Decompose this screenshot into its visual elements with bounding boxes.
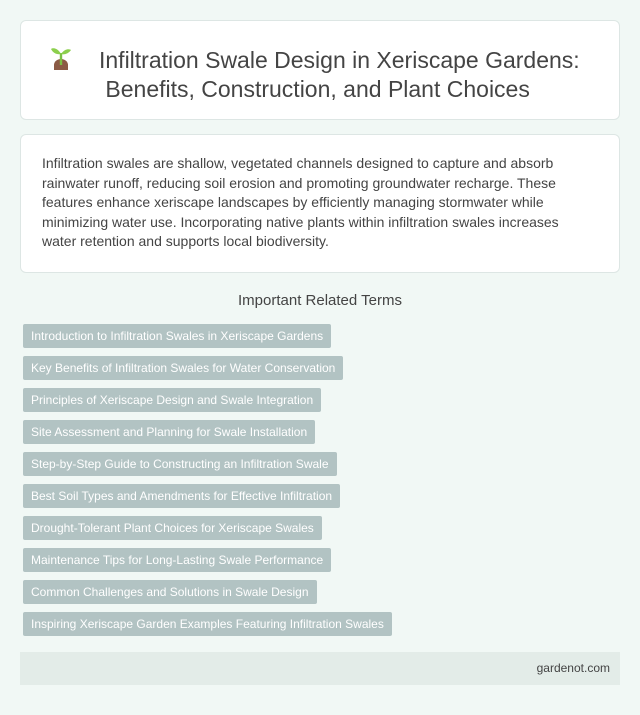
intro text panel: [20, 134, 620, 273]
tag list: Principles of Xeriscape Design and Swale Integration: [31, 393, 313, 407]
intro text panel: Infiltration swales are shallow, vegetated channels designed to capture and absorb: [42, 155, 553, 171]
footer: gardenot.com: [537, 661, 610, 675]
intro text panel: features enhance xeriscape landscapes by efficiently managing stormwater while: [42, 194, 544, 210]
tag list: Common Challenges and Solutions in Swale Design: [31, 585, 308, 599]
section heading: Important Related Terms: [238, 292, 402, 309]
tag list: Drought-Tolerant Plant Choices for Xeriscape Swales: [31, 521, 314, 535]
tag list: Site Assessment and Planning for Swale Installation: [31, 425, 307, 439]
title: Benefits, Construction, and Plant Choices: [105, 76, 530, 102]
title: Infiltration Swale Design in Xeriscape Gardens:: [99, 47, 580, 73]
footer: [20, 652, 620, 685]
title: [99, 47, 580, 102]
tag list: [23, 324, 392, 636]
tag list: Inspiring Xeriscape Garden Examples Featuring Infiltration Swales: [31, 617, 384, 631]
tag list: Maintenance Tips for Long-Lasting Swale Performance: [31, 553, 323, 567]
icon: seedling: [51, 48, 71, 70]
intro text panel: water retention and supports local biodiversity.: [42, 233, 329, 249]
intro text panel: rainwater runoff, reducing soil erosion and promoting groundwater recharge. These: [42, 174, 556, 190]
tag list: Introduction to Infiltration Swales in Xeriscape Gardens: [31, 329, 323, 343]
tag list: Step-by-Step Guide to Constructing an Infiltration Swale: [31, 457, 328, 471]
tag list: Key Benefits of Infiltration Swales for Water Conservation: [31, 361, 335, 375]
intro text panel: minimizing water use. Incorporating native plants within infiltration swales increases: [42, 214, 559, 230]
header panel: [20, 20, 620, 120]
tag list: Best Soil Types and Amendments for Effective Infiltration: [31, 489, 332, 503]
